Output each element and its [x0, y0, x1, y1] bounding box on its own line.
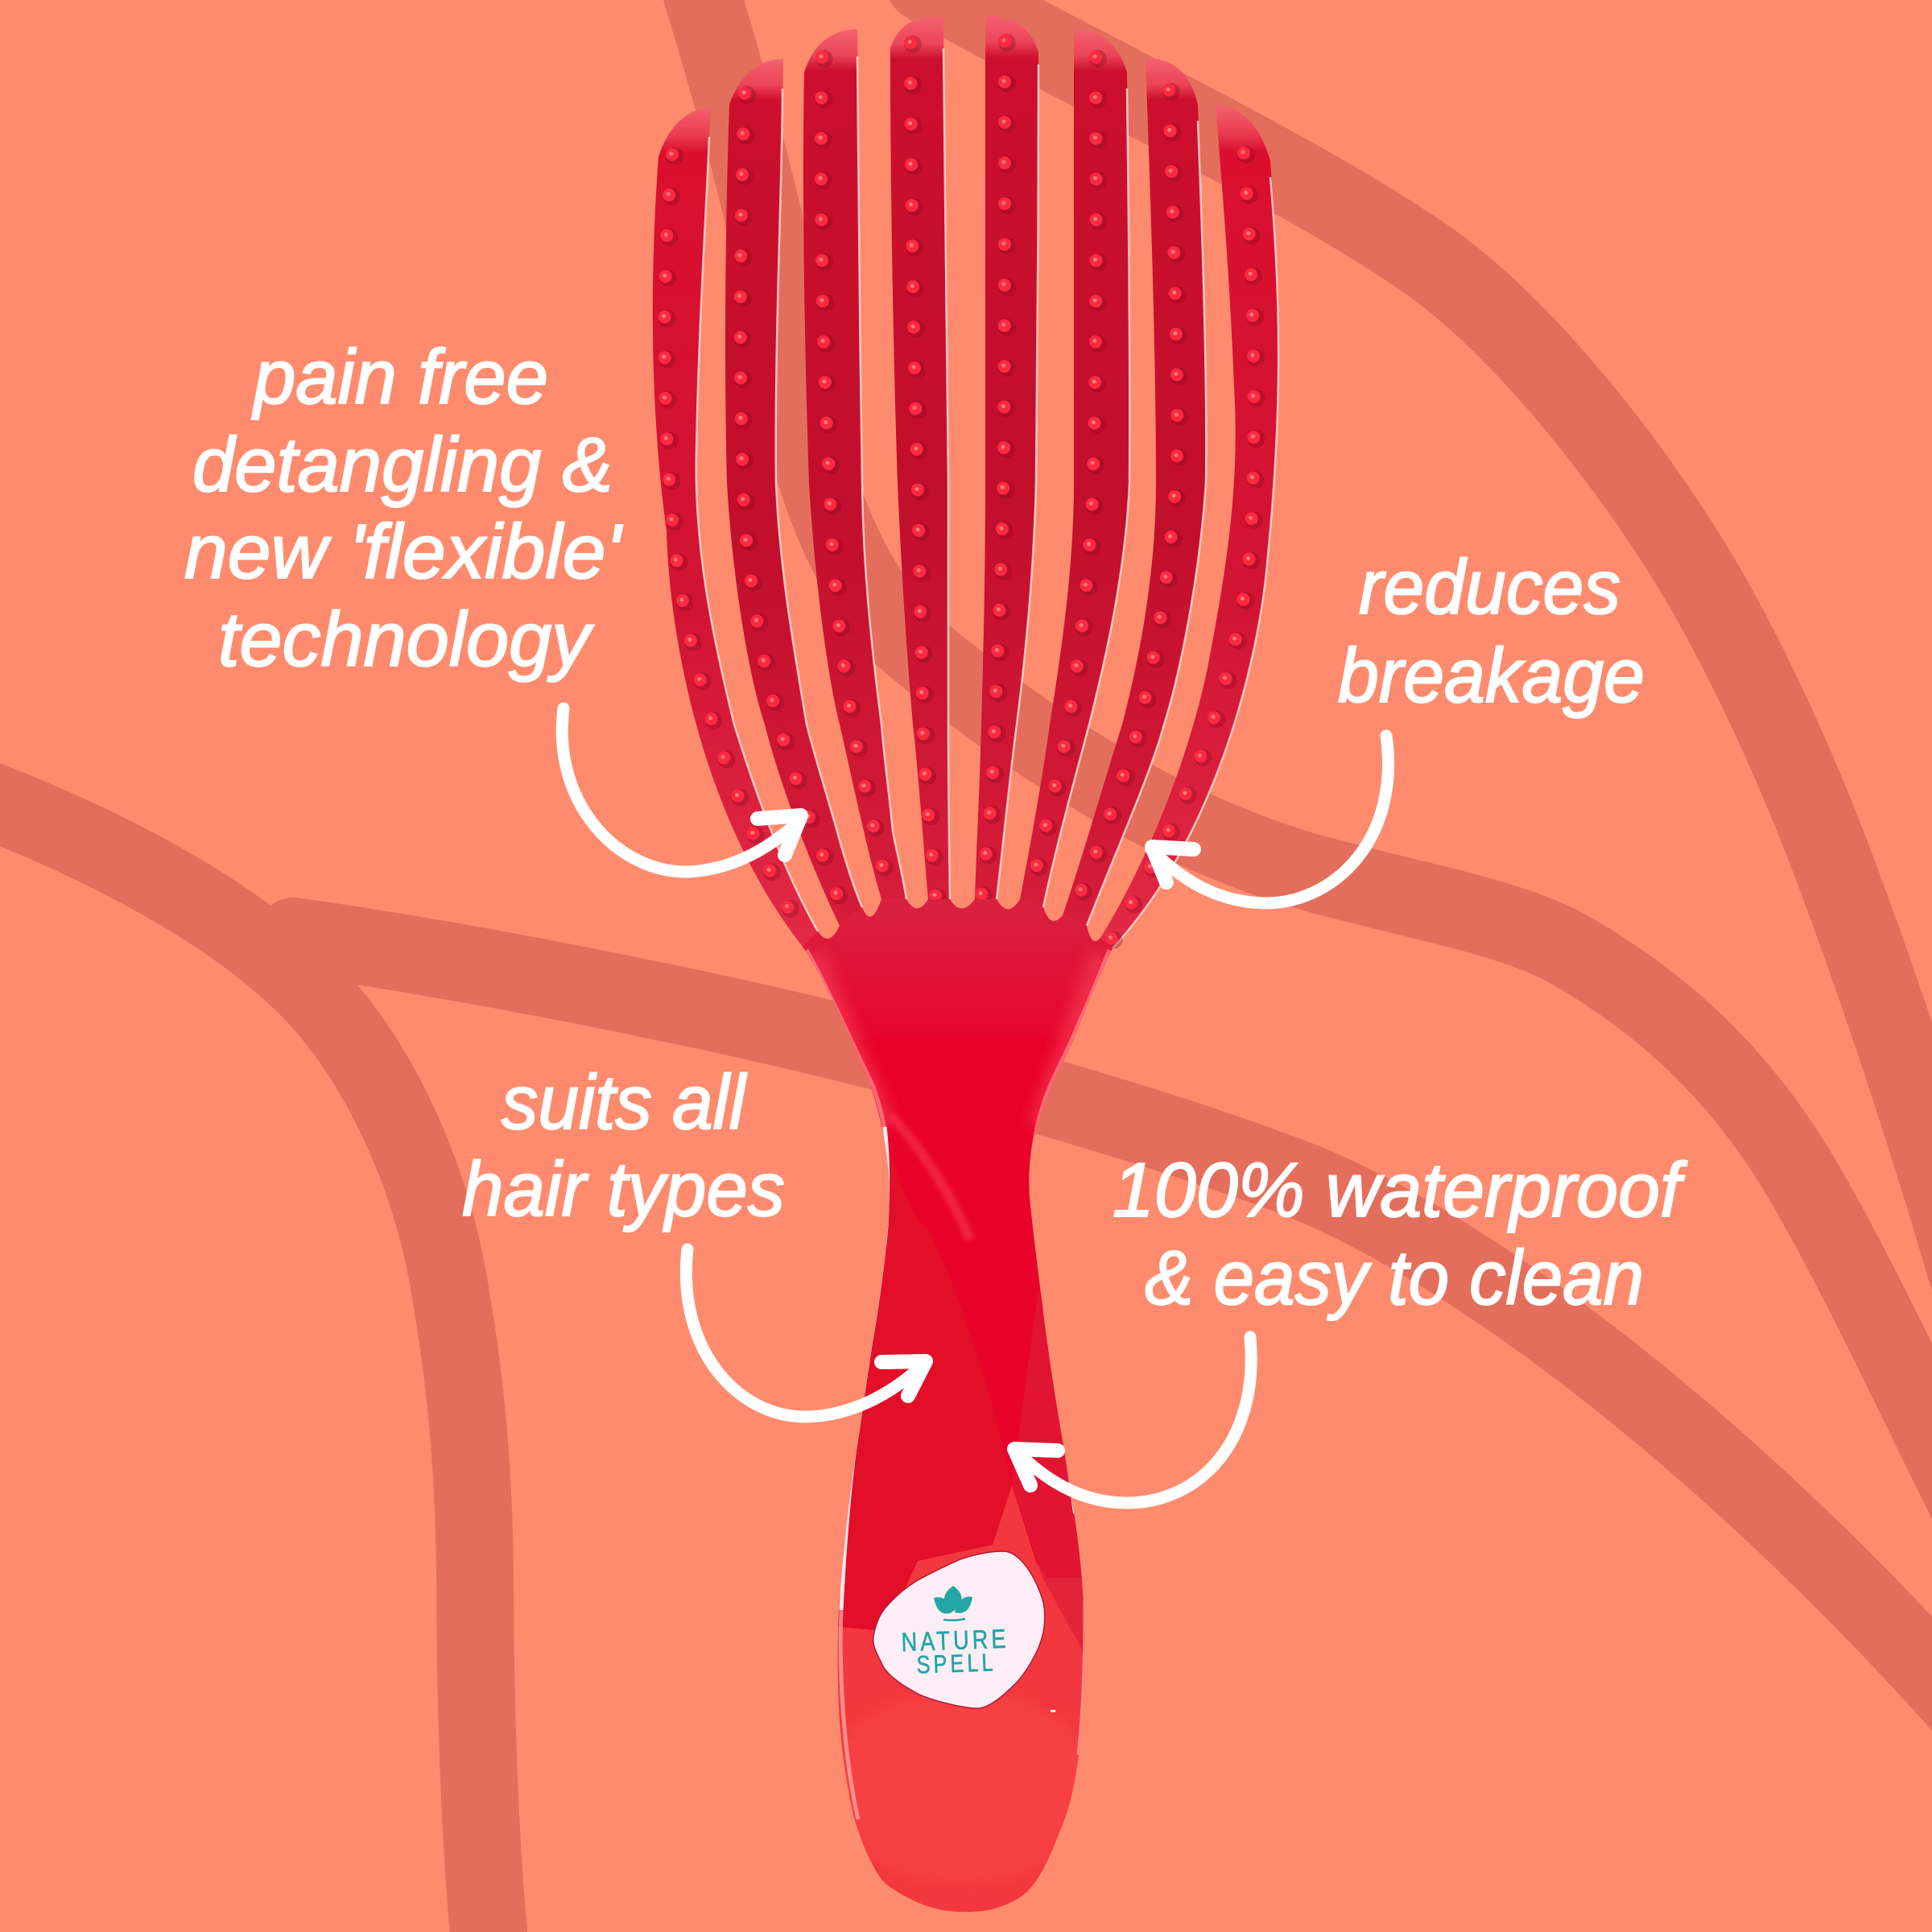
logo wordmark: NATURE [901, 1624, 1009, 1657]
edge highlights [807, 950, 1109, 1143]
caption: reduces breakage [1338, 544, 1645, 719]
caption: reduces breakage: breakage [1338, 633, 1645, 719]
tine 2 [725, 59, 862, 926]
caption: suits all hair types: hair types [462, 1146, 785, 1232]
tine edge highlights [696, 48, 1278, 948]
caption: pain free detangling: technology [218, 597, 594, 683]
tine 5 [975, 15, 1038, 899]
crimson upper handle [838, 1038, 1082, 1630]
crease [890, 1115, 970, 1240]
tine 3 [803, 29, 906, 899]
sticker with logo [873, 1551, 1045, 1708]
caption: pain free detangling: new 'flexible' [184, 509, 624, 595]
palm edge glow [813, 954, 1101, 1127]
arrow: to handle, right [1014, 1337, 1251, 1503]
tine 8 [1100, 105, 1278, 948]
logo wordmark [901, 1624, 1010, 1679]
right lobe [1012, 1288, 1087, 1658]
caption: suits all hair types [462, 1059, 785, 1232]
tine 7 [1063, 58, 1206, 926]
caption: pain free detangling: detangling & [192, 422, 613, 508]
caption: pain free detangling [184, 334, 624, 683]
logo leaves [934, 1586, 972, 1620]
arrow: to tines, right [1151, 736, 1389, 903]
darker left lobe [837, 1151, 1012, 1631]
bristles [664, 40, 1257, 943]
handle shine speck [1051, 1710, 1055, 1712]
caption: waterproof: & easy to clean [1145, 1235, 1644, 1321]
tine 6 [1020, 29, 1129, 907]
arrow: to handle, left [686, 1249, 926, 1417]
caption: waterproof: 100% waterproof [1113, 1147, 1687, 1233]
caption: pain free detangling: pain free [251, 334, 548, 420]
brush [653, 15, 1278, 1932]
caption: waterproof [1113, 1147, 1687, 1321]
palm and handle [803, 899, 1113, 1912]
tine 4 [890, 17, 950, 899]
lower gloss [825, 1690, 1099, 1884]
arrow: to tines, left [562, 708, 801, 872]
tine 1 [653, 106, 818, 947]
caption: reduces breakage: reduces [1359, 544, 1620, 630]
logo wordmark: SPELL [916, 1648, 997, 1679]
caption: suits all hair types: suits all [502, 1059, 748, 1146]
